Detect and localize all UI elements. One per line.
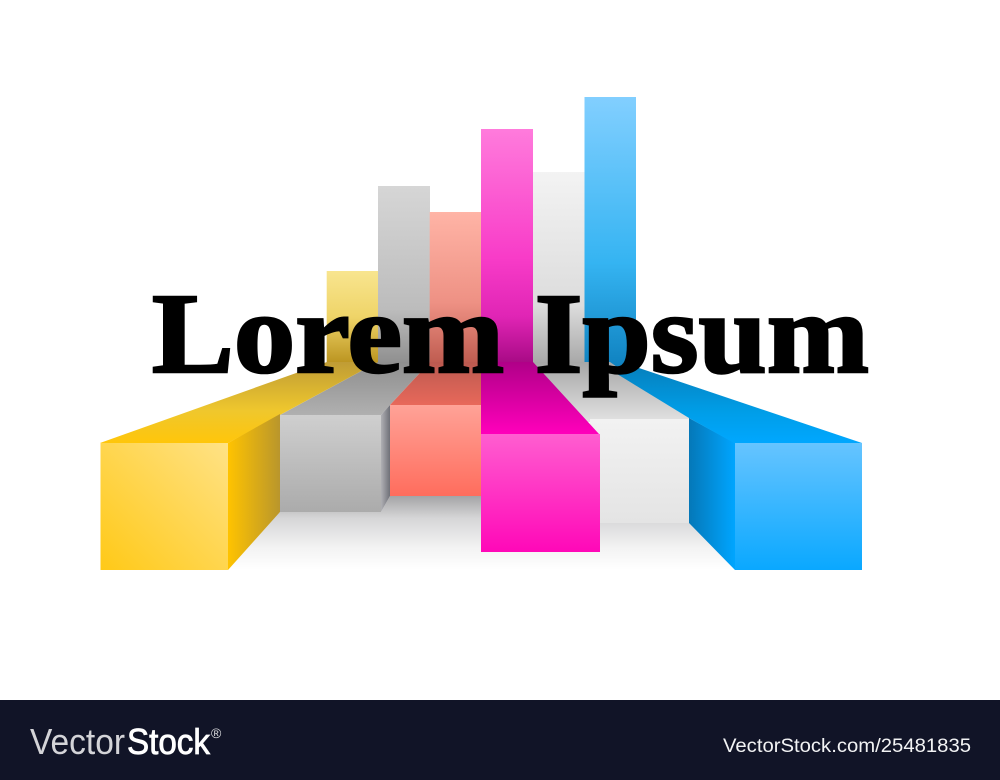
- column: magenta: [481, 362, 600, 552]
- footer bar: [0, 700, 1000, 780]
- back bars chart: [327, 97, 636, 373]
- title: Lorem Ipsum: [152, 270, 869, 397]
- floor shadow: [228, 496, 735, 570]
- column: yellow: [100, 362, 378, 570]
- registered mark: ®: [211, 725, 222, 741]
- footer image id: VectorStock.com/25481835: [723, 736, 971, 757]
- column: white: [530, 362, 695, 523]
- column: salmon: [390, 362, 481, 496]
- footer logo: Stock: [127, 721, 211, 762]
- footer logo: Vector: [30, 721, 125, 762]
- column: blue: [604, 366, 862, 570]
- footer logo: [30, 721, 211, 762]
- column: gray: [280, 362, 430, 512]
